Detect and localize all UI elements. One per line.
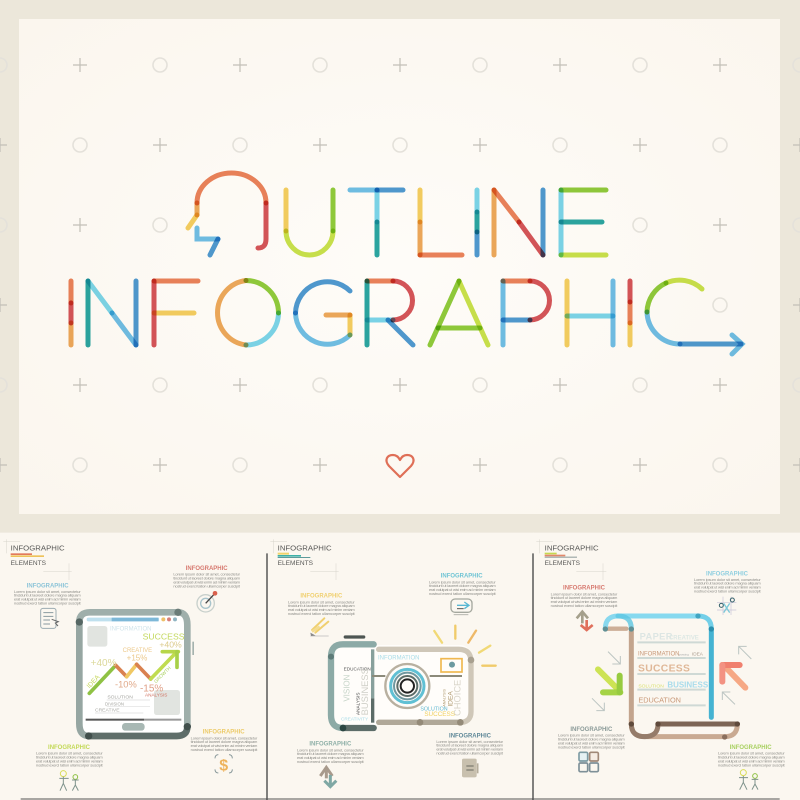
letter E [561,190,606,255]
text block: green [36,745,104,767]
header: ELEMENTS [278,560,314,567]
text block: slate [436,733,504,756]
lens [385,664,429,708]
text block: green [718,745,786,767]
text block: yellow: tincidunt ut laoreet dolore magna aliquam [288,603,355,608]
paper scroll: SOLUTION [638,683,664,689]
text block: red: Lorem ipsum dolor sit amet, consectetur [173,572,241,577]
text block: gray: tincidunt ut laoreet dolore magna aliquam [558,736,625,741]
tablet: CREATIVE [95,708,120,714]
icon: heart [386,455,414,477]
text block: yellow [191,730,258,752]
letter H [567,281,613,345]
text block: light blue: erat volutpat ut wisi enim ad minim veniam [694,585,761,590]
text block: green: erat volutpat ut wisi enim ad minim veniam [718,758,785,763]
tablet: -15% [140,684,163,695]
header: INFOGRAPHIC [545,544,599,553]
text block: red: nostrud exerci tation ullamcorper suscipit [173,583,241,588]
letter N [88,281,136,345]
text block: light blue: tincidunt ut laoreet dolore magna aliquam [694,581,761,586]
text block: cyan: INFOGRAPHIC [441,574,483,580]
text block: yellow: INFOGRAPHIC [300,594,343,600]
header: ELEMENTS [11,560,47,567]
letter O [218,280,278,345]
text block: sage: erat volutpat ut wisi enim ad minim veniam [297,755,364,760]
text block: red: Lorem ipsum dolor sit amet, consectetur [551,591,618,596]
growth chart arrow [89,652,178,693]
text block: red: erat volutpat ut wisi enim ad minim veniam [551,599,618,604]
header [3,539,72,580]
letter O as head profile [188,173,266,255]
camera: CHOICE [452,680,462,716]
camera: VISION [343,674,352,702]
text block: red [551,586,618,608]
text block: green: nostrud exerci tation ullamcorper suscipit [36,762,104,767]
tablet: +40% [159,639,182,649]
tablet: CREATIVE [123,648,152,654]
icon: arrows [577,612,593,630]
icon: people [739,770,758,790]
text block: gray: Lorem ipsum dolor sit amet, consectetur [558,733,625,738]
text block: slate: Lorem ipsum dolor sit amet, consectetur [436,739,504,744]
header: INFOGRAPHIC [11,544,65,553]
text block: sage: tincidunt ut laoreet dolore magna aliquam [297,751,364,756]
text block: green: INFOGRAPHIC [730,745,772,751]
text block: red [173,566,241,588]
tablet: INFORMATION [110,627,151,633]
tablet: SUCCESS [143,631,185,641]
text block: cyan: nostrud exerci tation ullamcorper suscipit [429,591,497,596]
panel: paper scroll infographic [533,533,800,800]
letter I [474,190,480,255]
icon: up and down arrows [320,767,336,787]
text block: slate: tincidunt ut laoreet dolore magna aliquam [436,743,504,748]
viewfinder [441,659,462,672]
letter R [367,281,413,345]
text block: red: INFOGRAPHIC [563,586,606,592]
camera: CREATIVITY [341,716,368,721]
icon: target [197,591,217,612]
text block: slate: INFOGRAPHIC [449,733,492,739]
paper scroll: SUCCESS [638,663,690,674]
tablet: ANALYSIS [145,693,167,698]
camera: INFORMATION [378,655,419,661]
text block: slate: erat volutpat ut wisi enim ad minim veniam [436,747,504,752]
tablet: +15% [127,654,147,663]
text block: gray: INFOGRAPHIC [570,727,613,733]
paper scroll: IDEA [692,651,704,656]
panel: camera infographic [267,533,534,800]
paper scroll: PAPER [640,631,673,641]
text block: slate: nostrud exerci tation ullamcorper suscipit [436,751,504,756]
letter P [503,281,550,345]
tablet: -10% [115,680,137,690]
text block: yellow: tincidunt ut laoreet dolore magna aliquam [191,739,258,744]
letter U [286,190,333,255]
text block: cyan: Lorem ipsum dolor sit amet, consectetur [429,579,496,584]
text block: sage: nostrud exerci tation ullamcorper suscipit [297,759,365,764]
icon: people [59,771,79,791]
camera: BUSINESS [360,668,370,715]
icon: screen with arrow [451,599,472,615]
small arrows [592,646,751,711]
text block: cyan: erat volutpat ut wisi enim ad minim veniam [429,587,496,592]
camera: ANALYSIS [442,688,446,707]
paper scroll: EDUCATION [638,696,681,705]
text block: green: tincidunt ut laoreet dolore magna aliquam [36,754,103,759]
paper scroll: BUSINESS [667,680,709,689]
text block: cyan [429,574,497,596]
text block: red: nostrud exerci tation ullamcorper suscipit [551,603,618,608]
icon: document with cursor [41,608,58,628]
text block: cyan: tincidunt ut laoreet dolore magna aliquam [429,583,496,588]
text block: light blue [694,571,762,594]
text block: blue: Lorem ipsum dolor sit amet, consectetur [14,589,81,594]
tablet: SOLUTION [107,694,133,700]
text block: gray: erat volutpat ut wisi enim ad minim veniam [558,740,625,745]
text block: green: tincidunt ut laoreet dolore magna aliquam [718,754,785,759]
icon: tic tac toe [717,597,736,615]
text block: yellow [288,594,356,616]
text block: red: erat volutpat ut wisi enim ad minim veniam [173,579,241,584]
text block: yellow: nostrud exerci tation ullamcorper suscipit [191,747,258,752]
text block: gray [558,727,626,749]
camera: EDUCATION [344,667,371,672]
tablet: DIVISION [105,702,124,707]
text block: yellow: erat volutpat ut wisi enim ad minim veniam [288,607,355,612]
paper scroll [603,613,740,740]
tablet: +40% [91,658,117,669]
title: OUTLINE lettering [188,173,606,255]
text block: green: INFOGRAPHIC [48,745,91,751]
icon: dollar: $ [219,758,228,775]
text block: yellow: erat volutpat ut wisi enim ad minim veniam [191,743,258,748]
camera: IDEA [447,691,454,707]
text block: green: Lorem ipsum dolor sit amet, consectetur [36,751,103,756]
panel: cover poster [19,19,780,514]
camera: ANALYSIS [356,693,361,715]
text block: blue [14,583,82,606]
letter L [420,190,462,255]
tablet [76,609,194,740]
text block: light blue: nostrud exerci tation ullamcorper suscipit [694,589,762,594]
letter I [628,281,632,345]
text block: light blue: INFOGRAPHIC [706,571,749,577]
text block: sage: INFOGRAPHIC [309,742,352,748]
text block: light blue: Lorem ipsum dolor sit amet, consectetur [694,577,761,582]
text block: yellow: Lorem ipsum dolor sit amet, consectetur [191,735,258,740]
text block: gray: nostrud exerci tation ullamcorper suscipit [558,744,626,749]
arrow: green [598,669,620,692]
text block: sage [297,742,365,764]
letter G [296,282,350,344]
camera: SOLUTION [420,706,448,712]
text block: green: nostrud exerci tation ullamcorper suscipit [718,762,786,767]
paper scroll: INFORMATION [638,651,679,657]
header [270,539,339,580]
arrow: orange [722,665,745,688]
icon: puzzle [579,752,598,772]
header [536,539,606,580]
text block: blue: INFOGRAPHIC [27,583,69,589]
text block: green: erat volutpat ut wisi enim ad minim veniam [36,758,103,763]
tablet: IDEA [86,673,102,690]
text block: red: tincidunt ut laoreet dolore magna aliquam [551,595,618,600]
browser bar [87,617,177,621]
letter I [68,281,74,345]
panel: tablet infographic [0,533,267,800]
text block: yellow: Lorem ipsum dolor sit amet, consectetur [288,599,355,604]
icon: pencil [310,618,329,636]
letter F [154,281,198,345]
camera [328,626,496,731]
icon: dollar [215,755,232,775]
text block: blue: tincidunt ut laoreet dolore magna aliquam [14,593,81,598]
text block: yellow: INFOGRAPHIC [203,730,245,736]
icon: notebook [462,759,478,777]
text block: yellow: nostrud exerci tation ullamcorper suscipit [288,611,356,616]
letter A [430,281,488,345]
flash rays [434,626,496,666]
letter N [494,190,543,255]
text block: blue: erat volutpat ut wisi enim ad minim veniam [14,597,81,602]
header: INFOGRAPHIC [278,544,332,553]
text block: sage: Lorem ipsum dolor sit amet, consectetur [297,747,364,752]
text block: red: INFOGRAPHIC [186,566,228,572]
text block: green: Lorem ipsum dolor sit amet, consectetur [718,751,785,756]
tablet: GROWTH [153,665,172,684]
text block: blue: nostrud exerci tation ullamcorper suscipit [14,601,82,606]
paper scroll: CREATIVE [669,635,699,641]
letter T [350,190,403,255]
header: ELEMENTS [545,560,581,567]
camera: SUCCESS [424,711,455,718]
text block: red: tincidunt ut laoreet dolore magna aliquam [173,575,241,580]
title: INFOGRAPHIC lettering [71,280,742,354]
paper scroll: growing [678,652,689,656]
letter C with arrow [647,280,742,354]
